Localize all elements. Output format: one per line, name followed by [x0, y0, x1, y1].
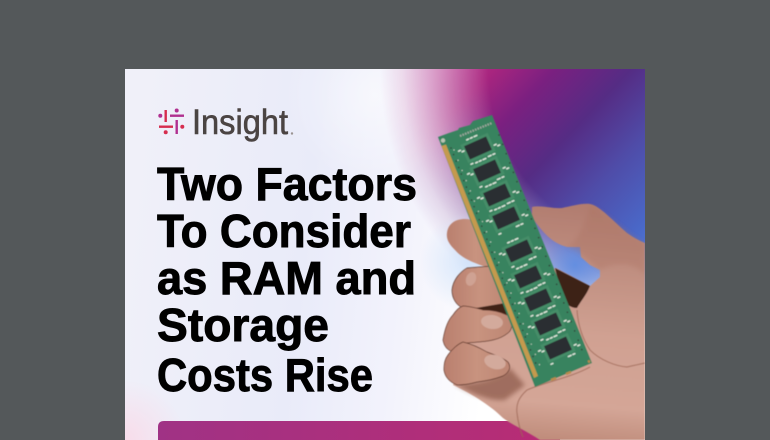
RAM mounting hole — [441, 138, 445, 143]
title: Costs Rise — [157, 349, 373, 401]
hand: index finger — [446, 218, 488, 267]
call-to-action bar — [158, 421, 560, 440]
panel: card with gradient background — [125, 69, 645, 440]
RAM top component row — [460, 123, 492, 136]
logo: Insight — [158, 103, 293, 142]
hand: palm creases — [517, 310, 645, 437]
hand: shadow between thumb and palm — [555, 268, 590, 308]
infographic canvas — [125, 69, 645, 440]
hand: middle fingernail — [466, 272, 476, 286]
title: To Consider — [157, 205, 411, 257]
title: Storage — [157, 299, 329, 351]
hand: middle finger — [450, 266, 502, 308]
title — [157, 158, 417, 401]
hand: shadow under little finger — [455, 368, 525, 400]
hand: little fingernail — [484, 354, 506, 370]
title: Two Factors — [157, 158, 417, 210]
hand: ring fingernail — [480, 314, 504, 330]
hand: shadow between fingers — [476, 303, 508, 315]
title: as RAM and — [157, 252, 416, 304]
logo wordmark: Insight — [192, 103, 288, 142]
RAM chips — [456, 128, 582, 367]
illustration: hand holding RAM stick — [438, 115, 645, 440]
hand: thumb knuckle shading — [568, 216, 645, 270]
hand: palm and thumb — [453, 204, 645, 440]
hand: ring finger — [443, 306, 512, 352]
RAM circuit board — [438, 115, 592, 387]
RAM bottom contact notches — [551, 361, 590, 380]
RAM gold contact edge — [442, 144, 538, 378]
hand: little finger — [444, 342, 510, 385]
logo trademark dot — [291, 132, 293, 135]
RAM stick — [438, 115, 592, 387]
icon: Insight mark — [158, 108, 184, 134]
RAM surface components — [451, 135, 582, 366]
